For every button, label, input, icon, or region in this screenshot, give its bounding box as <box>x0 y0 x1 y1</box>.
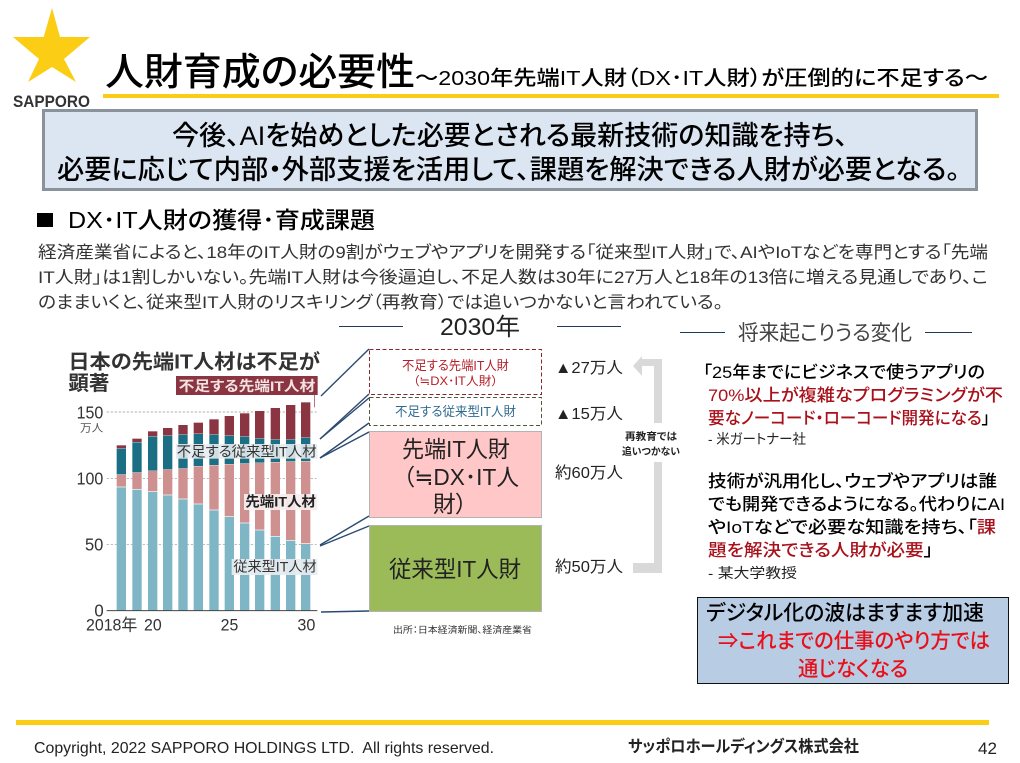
box: 従来型IT人財 <box>370 526 542 612</box>
arrow: reskilling cannot keep up: 追いつかない <box>622 445 680 458</box>
numbers: headcount values: ▲15万人 <box>555 406 623 423</box>
text block: professor quote: 題を解決できる人財が必要 」 <box>708 540 933 560</box>
callout: digitalization conclusion <box>698 598 1008 684</box>
text block: professor quote: - 某大学教授 <box>708 565 797 581</box>
box: 先端IT人財: 先端IT人財 <box>402 436 510 462</box>
box: 先端IT人財 <box>370 432 542 518</box>
series label: 不足する従来型IT人材: 不足する従来型IT人材 <box>177 443 317 459</box>
series label: 不足する先端IT人材 <box>176 376 318 407</box>
footer: サッポロホールディングス株式会社 <box>628 736 859 756</box>
callout: digitalization conclusion: 通じなくなる <box>798 658 908 681</box>
title: 人財育成の必要性 <box>105 52 415 94</box>
heading: 2030年: 2030年 <box>440 314 520 341</box>
chart title <box>68 349 320 395</box>
text block: professor quote <box>707 471 1005 581</box>
box: 従来型IT人財: 従来型IT人財 <box>389 556 521 582</box>
y axis labels: 100 <box>77 469 103 489</box>
footer: 42 <box>978 739 997 758</box>
callout: key message banner: 今後、AIを始めとした必要とされる最新技術の知識を持ち、 <box>172 121 848 151</box>
box: 不足する従来型IT人財: 不足する従来型IT人財 <box>395 404 516 419</box>
source note: 出所：日本経済新聞、経済産業省 <box>393 624 532 635</box>
arrow: reskilling cannot keep up: 再教育では <box>625 430 677 443</box>
text block: professor quote: でも開発できるようになる。代わりにAI <box>708 495 1005 514</box>
title <box>103 52 999 98</box>
callout: key message banner <box>44 110 976 190</box>
text block: explanation paragraph: IT人財」は1割しかいない。先端IT人財は今後逼迫し、不足人数は30年に27万人と18年の13倍に増える見通しであり、こ <box>38 268 988 287</box>
x axis: 20 <box>144 616 162 635</box>
x axis: 2018年 <box>86 616 137 635</box>
arrow: reskilling cannot keep up <box>622 356 680 573</box>
chart title: 日本の先端IT人材は不足が <box>68 349 320 373</box>
connector lines: chart to boxes <box>320 349 369 612</box>
numbers: headcount values: ▲27万人 <box>555 360 623 377</box>
bars: stacked segments per year <box>117 402 310 611</box>
callout: digitalization conclusion: ⇒これまでの仕事のやり方では <box>718 630 990 653</box>
text block: professor quote: 技術が汎用化し、ウェブやアプリは誰 <box>708 471 997 491</box>
x axis: 30 <box>297 616 315 635</box>
text block: professor quote: やIoTなどで必要な知識を持ち、「 課 <box>707 518 996 537</box>
series label: 従来型IT人材: 従来型IT人材 <box>233 559 317 575</box>
numbers: headcount values: 約60万人 <box>555 464 623 482</box>
y axis labels <box>77 402 104 621</box>
bar chart: IT talent shortage 2018-2030 <box>68 349 320 635</box>
box: 不足する先端IT人財 <box>370 350 542 394</box>
numbers: headcount values: 約50万人 <box>555 558 623 576</box>
text block: Gartner quote: 要なノーコード・ローコード開発になる」 <box>708 409 990 428</box>
box: 不足する先端IT人財: 不足する先端IT人財 <box>402 358 509 373</box>
y axis labels: 0 <box>94 601 104 621</box>
box: 先端IT人財: 財） <box>433 491 467 517</box>
text block: Gartner quote <box>703 363 1003 447</box>
numbers: headcount values <box>555 360 623 576</box>
heading: DX・IT人財の獲得・育成課題: DX･IT人財の獲得･育成課題 <box>68 207 375 233</box>
y axis labels: 150 <box>77 402 103 422</box>
icon: Sapporo star logo <box>13 8 90 111</box>
x axis: 25 <box>221 616 238 635</box>
y axis labels: 50 <box>85 535 103 555</box>
series label: 先端IT人材: 先端IT人材 <box>245 493 316 509</box>
chart title: 顕著 <box>68 372 109 395</box>
footer: Copyright, 2022 SAPPORO HOLDINGS LTD. All rights reserved. <box>34 740 494 757</box>
text block: Gartner quote: - 米ガートナー社 <box>708 431 806 447</box>
text block: explanation paragraph: のままいくと、従来型IT人財のリスキリング（再教育）では追いつかないと言われている。 <box>38 293 723 312</box>
title: ～2030年先端IT人財（DX･IT人財）が圧倒的に不足する～ <box>415 67 988 90</box>
box: 先端IT人財: （≒DX･IT人 <box>403 464 519 490</box>
icon: Sapporo star logo: SAPPORO <box>13 92 90 111</box>
box: 不足する従来型IT人財 <box>370 398 542 426</box>
text block: explanation paragraph <box>38 242 988 312</box>
box: 不足する先端IT人財: （≒DX･IT人財） <box>413 373 498 388</box>
text block: explanation paragraph: 経済産業省によると、18年のIT人財の9割がウェブやアプリを開発する「従来型IT人財」で、AIやIoTなどを専門とする「先端 <box>38 242 988 262</box>
y axis labels: 万人 <box>80 423 104 435</box>
text block: Gartner quote: 70%以上が複雑なプログラミングが不 <box>708 385 1003 405</box>
series label: 不足する先端IT人材: 不足する先端IT人材 <box>179 378 315 394</box>
x axis <box>86 611 317 635</box>
y axis gridlines <box>107 412 317 544</box>
footer <box>16 720 997 758</box>
callout: digitalization conclusion: デジタル化の波はますます加速 <box>706 601 984 625</box>
heading: 将来起こりうる変化: 将来起こりうる変化 <box>738 322 912 345</box>
callout: key message banner: 必要に応じて内部・外部支援を活用して、課題を解決できる人財が必要となる。 <box>57 155 960 185</box>
text block: Gartner quote: 「25年までにビジネスで使うアプリの <box>703 363 985 382</box>
